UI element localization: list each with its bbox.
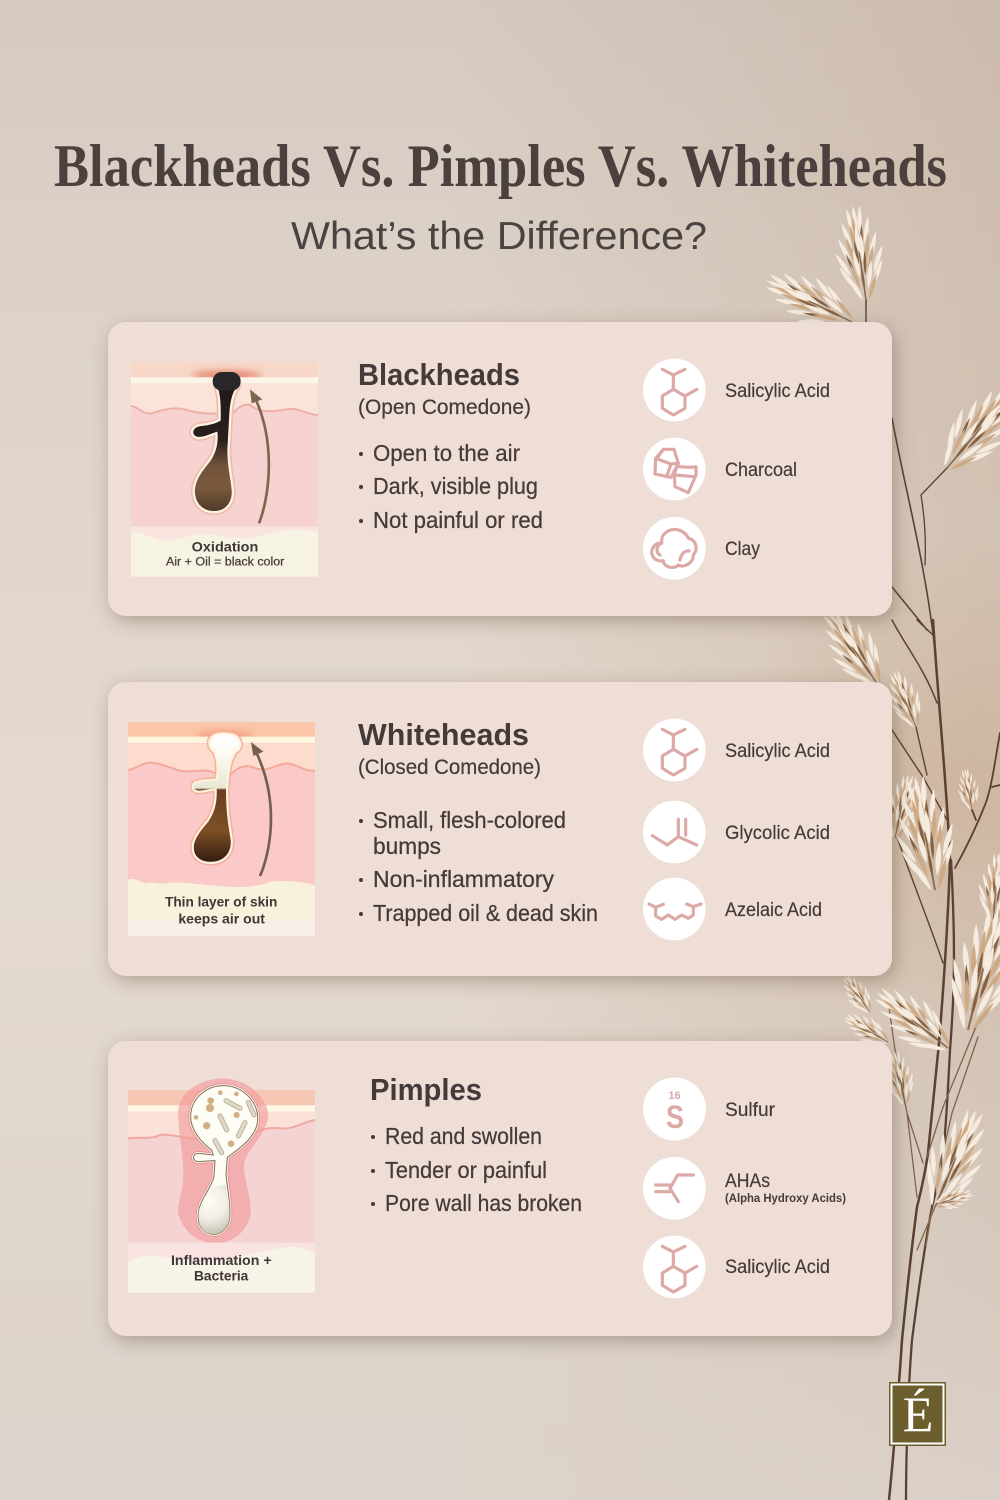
icon: azelaic acid (643, 878, 706, 940)
ingredients: pimples: Sulfur (725, 1100, 776, 1121)
ingredients: whiteheads: Salicylic Acid (725, 741, 830, 762)
caption (166, 539, 284, 569)
text: whiteheads description: Trapped oil & dead skin (373, 900, 598, 926)
icon: charcoal (643, 438, 706, 500)
ingredients: whiteheads: Glycolic Acid (725, 823, 830, 844)
ingredients: whiteheads (643, 719, 830, 940)
ingredients: blackheads (643, 359, 830, 580)
text: blackheads description: Blackheads (358, 357, 520, 392)
caption: keeps air out (178, 911, 265, 927)
panel: blackheads (108, 322, 892, 616)
illustration: blackhead pore (131, 362, 318, 577)
subtitle: What’s the Difference? (291, 215, 707, 258)
caption: Thin layer of skin (165, 894, 277, 910)
caption (165, 894, 277, 927)
text: pimples description: Red and swollen (385, 1123, 542, 1149)
caption: Air + Oil = black color (166, 555, 284, 569)
text: pimples description: Pimples (370, 1072, 482, 1107)
icon: glycolic acid (643, 801, 706, 863)
icon: clay (643, 517, 706, 580)
illustration: whitehead pore (128, 722, 315, 936)
panel: whiteheads (108, 682, 892, 976)
text: blackheads description: Dark, visible plug (373, 473, 538, 499)
icon: sulfur: S (666, 1099, 684, 1135)
card background (108, 322, 892, 616)
ingredients: blackheads: Clay (725, 539, 760, 560)
caption: Bacteria (194, 1268, 249, 1284)
caption: Inflammation + (171, 1252, 272, 1268)
card background (108, 1041, 892, 1336)
icon: sulfur: 16 (668, 1090, 681, 1102)
icon: AHAs (643, 1157, 706, 1220)
ingredients: whiteheads: Azelaic Acid (725, 900, 822, 921)
dried grass plant (755, 202, 1000, 1500)
text: blackheads description: (Open Comedone) (358, 396, 531, 419)
panel: pimples (108, 1041, 892, 1336)
text: blackheads description (358, 357, 543, 533)
text: blackheads description: Not painful or red (373, 507, 543, 533)
caption: Oxidation (192, 539, 258, 555)
text: whiteheads description: Small, flesh-colored (373, 807, 566, 833)
card background (108, 682, 892, 976)
caption (171, 1252, 272, 1284)
text: whiteheads description: (Closed Comedone) (358, 756, 541, 779)
icon: salicylic acid (643, 719, 706, 781)
ingredients: pimples: AHAs (725, 1171, 770, 1192)
text: pimples description: Tender or painful (385, 1157, 547, 1183)
arrow (251, 742, 271, 876)
text: whiteheads description (358, 717, 598, 926)
ingredients: pimples: (Alpha Hydroxy Acids) (725, 1193, 846, 1205)
logo (889, 1382, 946, 1446)
text: whiteheads description: Non-inflammatory (373, 866, 554, 892)
ingredients: blackheads: Charcoal (725, 460, 797, 481)
icon: salicylic acid (643, 359, 706, 421)
text: whiteheads description: Whiteheads (358, 717, 529, 752)
arrow (250, 389, 269, 523)
ingredients: blackheads: Salicylic Acid (725, 381, 830, 402)
text: blackheads description: Open to the air (373, 440, 520, 466)
icon: salicylic acid (643, 1236, 706, 1298)
illustration: pimple (128, 1078, 315, 1293)
text: pimples description: Pore wall has broken (385, 1190, 582, 1216)
text: pimples description (370, 1072, 582, 1216)
logo: É (903, 1386, 933, 1442)
ingredients: pimples: Salicylic Acid (725, 1257, 830, 1278)
icon: sulfur (643, 1078, 706, 1140)
ingredients: pimples (643, 1078, 846, 1298)
text: whiteheads description: bumps (373, 833, 441, 859)
bacteria (194, 1090, 254, 1153)
